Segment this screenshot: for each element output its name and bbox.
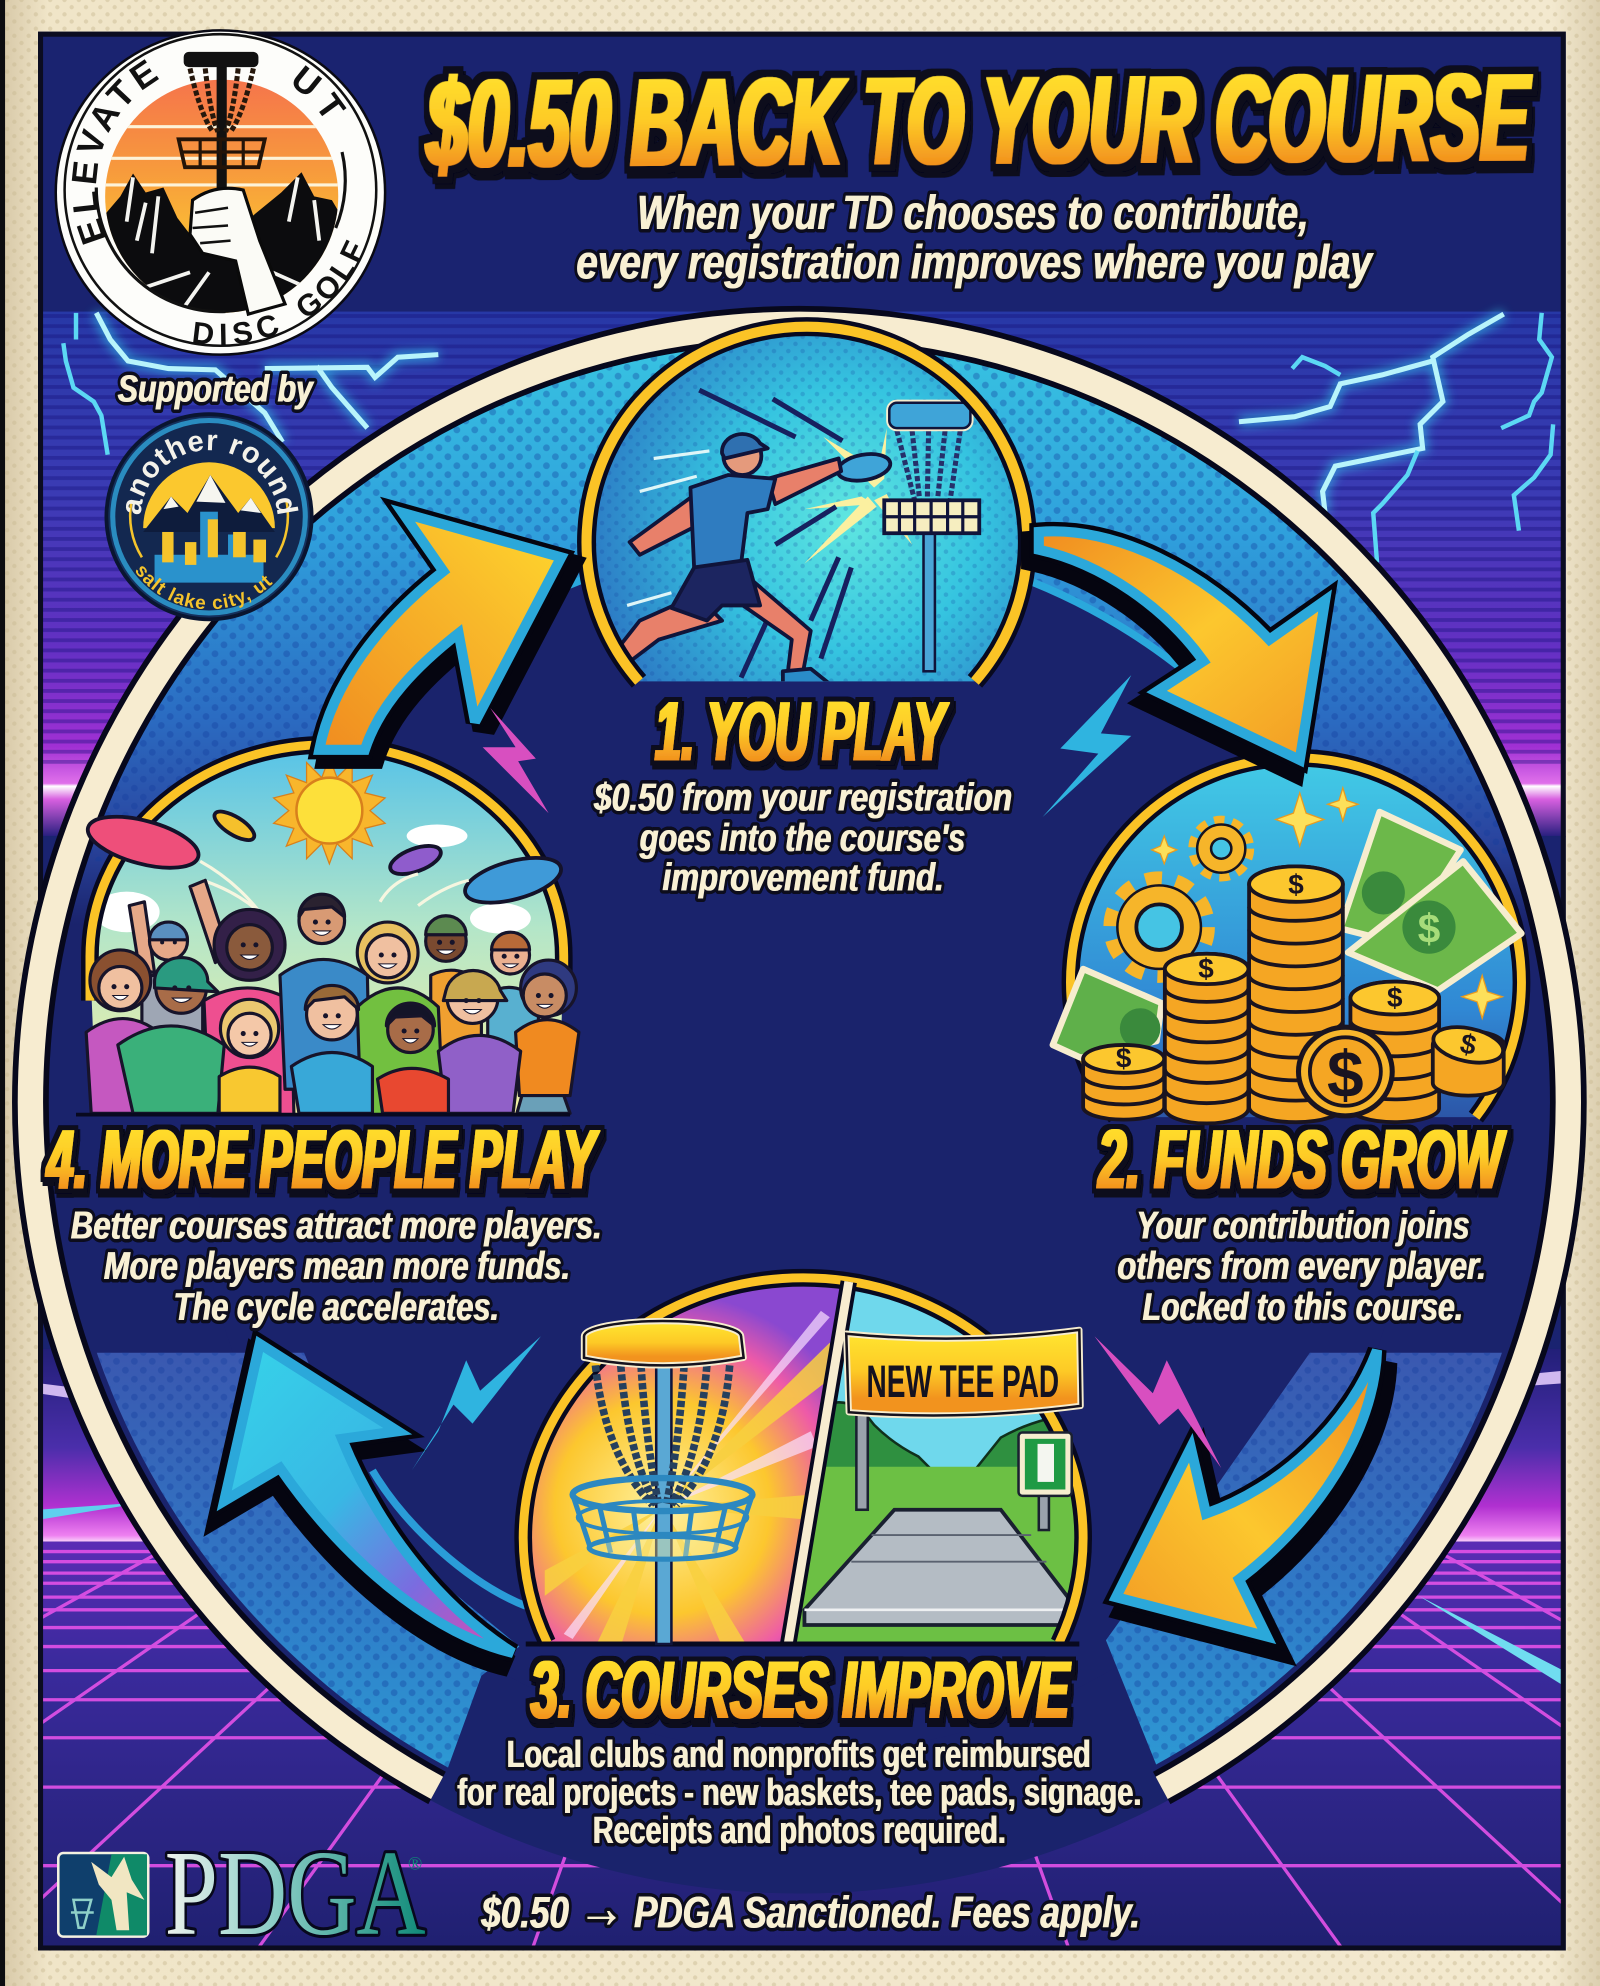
bills xyxy=(1053,812,1521,1058)
Elevate UT Disc Golf logo xyxy=(54,29,386,356)
supported by label: Supported by xyxy=(118,369,314,411)
gears xyxy=(1111,821,1249,975)
step 2 text: others from every player. xyxy=(1117,1244,1486,1288)
PDGA logo: ® xyxy=(408,1853,422,1874)
subtitle: every registration improves where you play xyxy=(576,236,1374,290)
logo fist xyxy=(190,188,285,314)
cream ring xyxy=(30,324,1568,1788)
step 1 illustration: you play xyxy=(583,323,1039,684)
sun xyxy=(274,757,385,864)
subtitle: When your TD chooses to contribute, xyxy=(637,186,1309,240)
banner: NEW TEE PAD xyxy=(867,1356,1059,1407)
step 1 text: 1. YOU PLAY xyxy=(655,684,949,778)
arrow: step 1 to step 2 xyxy=(1032,531,1325,770)
step 3 text: 3. COURSES IMPROVE xyxy=(531,1645,1071,1735)
PDGA logo: PDGA xyxy=(165,1827,426,1961)
step 1 text xyxy=(593,684,1012,899)
step 4 text xyxy=(46,1112,602,1329)
footer note: $0.50 → PDGA Sanctioned. Fees apply. xyxy=(481,1876,1140,1941)
step 2 text: Locked to this course. xyxy=(1143,1285,1463,1329)
step 3 text: Local clubs and nonprofits get reimbursed xyxy=(507,1734,1091,1776)
arrow: step 2 to step 3 xyxy=(1116,1350,1386,1649)
lightning accents xyxy=(412,675,1221,1471)
step 1 text: improvement fund. xyxy=(663,855,944,899)
logo basket xyxy=(179,52,265,196)
banner xyxy=(846,1330,1081,1416)
Elevate UT Disc Golf logo: GOLF xyxy=(298,240,360,316)
step 2 text xyxy=(1097,1112,1506,1329)
circular cycle disc xyxy=(76,351,1524,1894)
step 4 text: 4. MORE PEOPLE PLAY xyxy=(46,1112,600,1206)
Elevate UT Disc Golf logo: DISC xyxy=(193,315,278,344)
step 3 text xyxy=(457,1645,1141,1852)
disc golf basket xyxy=(884,403,979,671)
flying discs xyxy=(83,806,566,911)
step 4 text: The cycle accelerates. xyxy=(174,1285,499,1329)
basket xyxy=(573,1321,752,1644)
step 2 illustration: funds grow: $ xyxy=(1387,982,1403,1013)
arrow: step 3 to step 4 xyxy=(220,1344,513,1666)
sign xyxy=(1019,1433,1072,1496)
another round badge xyxy=(104,412,314,622)
step 2 illustration: funds grow: $ xyxy=(1418,905,1440,951)
Elevate UT Disc Golf logo: ELEVATE xyxy=(72,59,159,245)
step 4 text: Better courses attract more players. xyxy=(71,1204,602,1248)
tee sign posts xyxy=(856,1412,1049,1530)
step 2 illustration: funds grow: $ xyxy=(1327,1037,1364,1111)
step 1 text: goes into the course's xyxy=(639,816,965,860)
step 3 illustration: courses improve xyxy=(507,1267,1089,1647)
step 3 text: Receipts and photos required. xyxy=(593,1810,1006,1852)
arrow: step 4 to step 1 xyxy=(319,513,570,757)
step 2 illustration: funds grow: $ xyxy=(1458,1028,1480,1061)
subtitle xyxy=(576,186,1374,290)
step 2 illustration: funds grow: $ xyxy=(1288,869,1304,900)
step 4 text: More players mean more funds. xyxy=(104,1244,570,1288)
coin stacks xyxy=(1083,866,1506,1123)
step 2 text: Your contribution joins xyxy=(1136,1204,1470,1248)
step 2 illustration: funds grow: $ xyxy=(1198,953,1214,984)
another round badge: salt lake city, ut xyxy=(136,566,273,610)
sparkles xyxy=(1152,788,1502,1018)
step 2 illustration: funds grow: $ xyxy=(1116,1043,1132,1074)
another round badge: another round xyxy=(126,434,298,514)
Elevate UT Disc Golf logo: UT xyxy=(294,65,346,116)
step 4 illustration: more people play xyxy=(76,745,579,1115)
lightning bolts in background xyxy=(63,313,1553,562)
step 3 text: for real projects - new baskets, tee pads, signage. xyxy=(457,1772,1141,1814)
crowd xyxy=(86,880,579,1115)
PDGA logo xyxy=(58,1827,426,1961)
faces xyxy=(111,920,554,1046)
player xyxy=(622,432,844,682)
step 1 text: $0.50 from your registration xyxy=(593,776,1012,820)
step 2 illustration: funds grow xyxy=(1053,758,1521,1123)
